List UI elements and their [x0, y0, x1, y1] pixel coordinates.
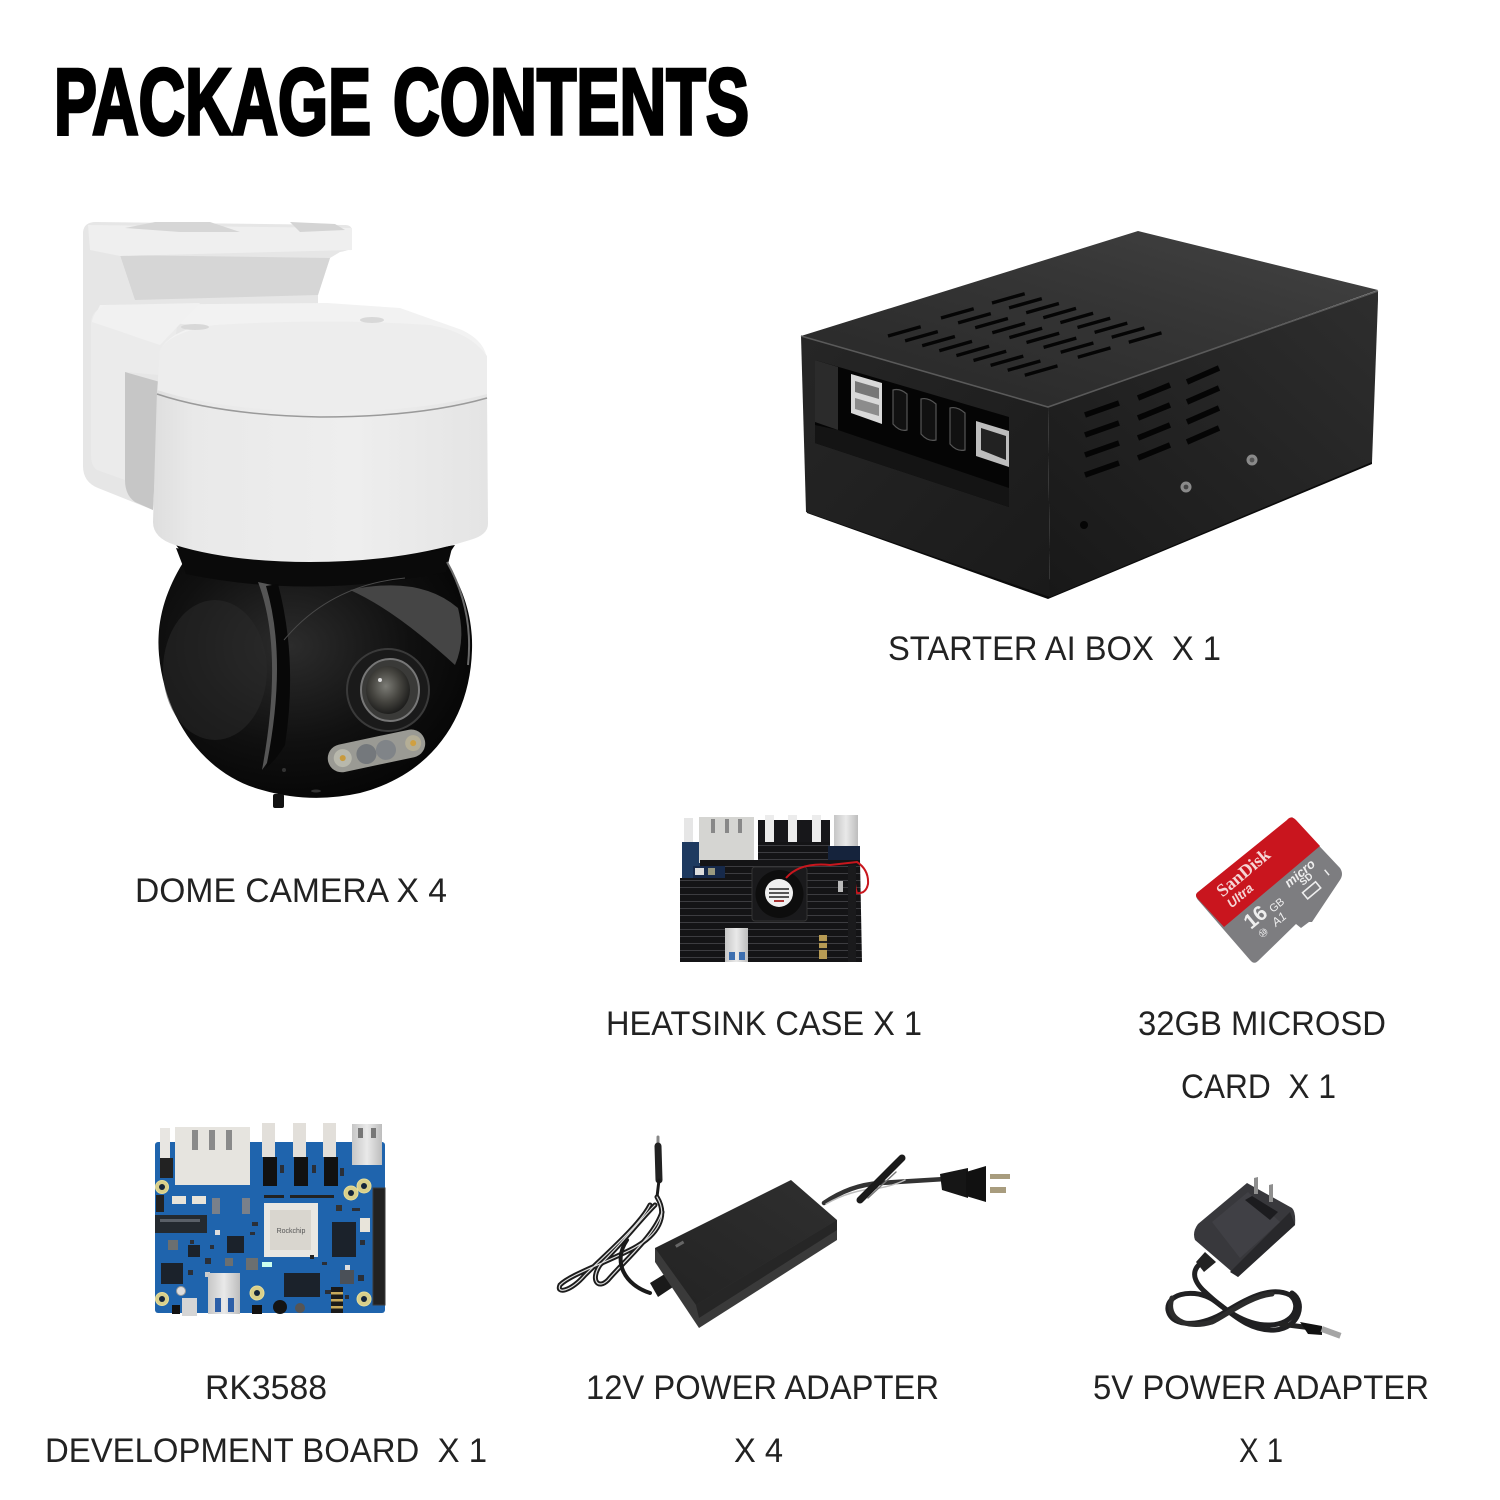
- 5v cable loop: [1168, 1260, 1312, 1330]
- board usb-c and jacks: [172, 1286, 343, 1316]
- 5v strain relief: [1196, 1252, 1216, 1272]
- board small connectors and parts: [156, 1165, 370, 1299]
- 5v plug prongs: [1254, 1177, 1273, 1202]
- board soc chip: Rockchip: [277, 1228, 305, 1235]
- heatsink case: [680, 815, 868, 962]
- camera black dome: [158, 545, 472, 798]
- 5v connector: [1300, 1322, 1341, 1339]
- 12v barrel plug and cable: [559, 1137, 662, 1293]
- label: 12v adapter: 12V POWER ADAPTER: [586, 1369, 939, 1407]
- sd card microsd logo: SD: [1298, 871, 1316, 888]
- box top face: [801, 231, 1378, 407]
- board usb3 port: [208, 1273, 240, 1314]
- heatsink ports: [682, 815, 860, 878]
- board memory chips: [161, 1222, 356, 1297]
- hdmi ports: [893, 390, 965, 450]
- label: 5v adapter: 5V POWER ADAPTER: [1093, 1369, 1429, 1407]
- heatsink wire: [786, 862, 868, 893]
- sd card brand text: SanDisk: [1212, 844, 1274, 901]
- ethernet port: [976, 421, 1009, 467]
- title: [54, 49, 749, 154]
- sd card microsd logo: [1281, 856, 1332, 899]
- sd card body: [1196, 817, 1342, 963]
- heatsink usb: [725, 928, 748, 962]
- label: 5v adapter: X 1: [1239, 1432, 1283, 1470]
- 12v power adapter: [559, 1137, 1010, 1328]
- board pcb: [155, 1142, 385, 1313]
- label: 12v adapter: X 4: [734, 1432, 783, 1470]
- board ethernet port: [160, 1127, 250, 1185]
- board gpio header: [373, 1188, 385, 1305]
- camera housing: [92, 303, 488, 562]
- sd card red band: [1196, 818, 1320, 927]
- sd card a1 mark: [1256, 909, 1289, 941]
- labels: [45, 630, 1429, 1470]
- 12v mains cable: [824, 1158, 945, 1204]
- heatsink fan: [752, 867, 807, 921]
- sd card a1 mark: ⑩: [1256, 926, 1272, 941]
- 12v adapter brick: [655, 1180, 837, 1328]
- label: 5v adapter: [1093, 1369, 1429, 1470]
- camera lens: [347, 649, 429, 731]
- label: dome camera: DOME CAMERA X 4: [135, 872, 447, 910]
- label: microsd card: 32GB MICROSD: [1138, 1005, 1386, 1043]
- camera stub: [273, 794, 284, 808]
- label: development board: RK3588: [205, 1369, 327, 1407]
- box top vents: [888, 294, 1161, 375]
- 5v adapter body: [1194, 1183, 1295, 1277]
- dome camera: [83, 222, 488, 808]
- 5v power adapter: [1168, 1177, 1341, 1339]
- board m.2 slot: [155, 1215, 207, 1233]
- camera led strip: [325, 727, 428, 775]
- box port cutout: [815, 360, 1009, 507]
- sd card ultra text: Ultra: [1224, 880, 1256, 911]
- sd card capacity text: 16: [1239, 901, 1272, 934]
- title: CONTENTS: [393, 49, 749, 154]
- board hole centres: [159, 1183, 367, 1302]
- board mounting holes: [156, 1179, 371, 1306]
- board usb top: [352, 1124, 382, 1165]
- label: microsd card: CARD X 1: [1181, 1068, 1336, 1106]
- board hdmi ports: [262, 1123, 338, 1186]
- sd card a1 mark: A1: [1268, 909, 1289, 930]
- label: starter ai box: STARTER AI BOX X 1: [888, 630, 1221, 668]
- camera wall bracket: [83, 222, 352, 510]
- box screws and hole: [1080, 454, 1258, 529]
- heatsink body: [680, 860, 862, 962]
- box side face: [1048, 291, 1378, 597]
- rk3588 development board: [155, 1123, 385, 1316]
- label: development board: DEVELOPMENT BOARD X 1: [45, 1432, 487, 1470]
- usb ports: [851, 374, 882, 424]
- microsd card: [1196, 817, 1342, 963]
- label: heatsink case: HEATSINK CASE X 1: [606, 1005, 922, 1043]
- sd card capacity text: [1239, 896, 1287, 934]
- sd card microsd logo: micro: [1281, 856, 1318, 890]
- box shadow edge: [807, 450, 1372, 599]
- title: PACKAGE: [54, 49, 371, 154]
- label: 12v adapter: [586, 1369, 939, 1470]
- label: microsd card: [1138, 1005, 1386, 1106]
- box front face: [801, 336, 1050, 597]
- label: development board: [45, 1369, 487, 1470]
- starter ai box: [801, 231, 1378, 599]
- box side vents: [1085, 368, 1219, 475]
- sd card microsd logo: I: [1323, 868, 1332, 878]
- 12v plug: [940, 1166, 1010, 1202]
- 12v strain relief: [650, 1272, 676, 1297]
- board soc chip: [264, 1203, 318, 1257]
- heatsink connectors: [819, 865, 856, 962]
- sd card capacity text: GB: [1267, 896, 1287, 915]
